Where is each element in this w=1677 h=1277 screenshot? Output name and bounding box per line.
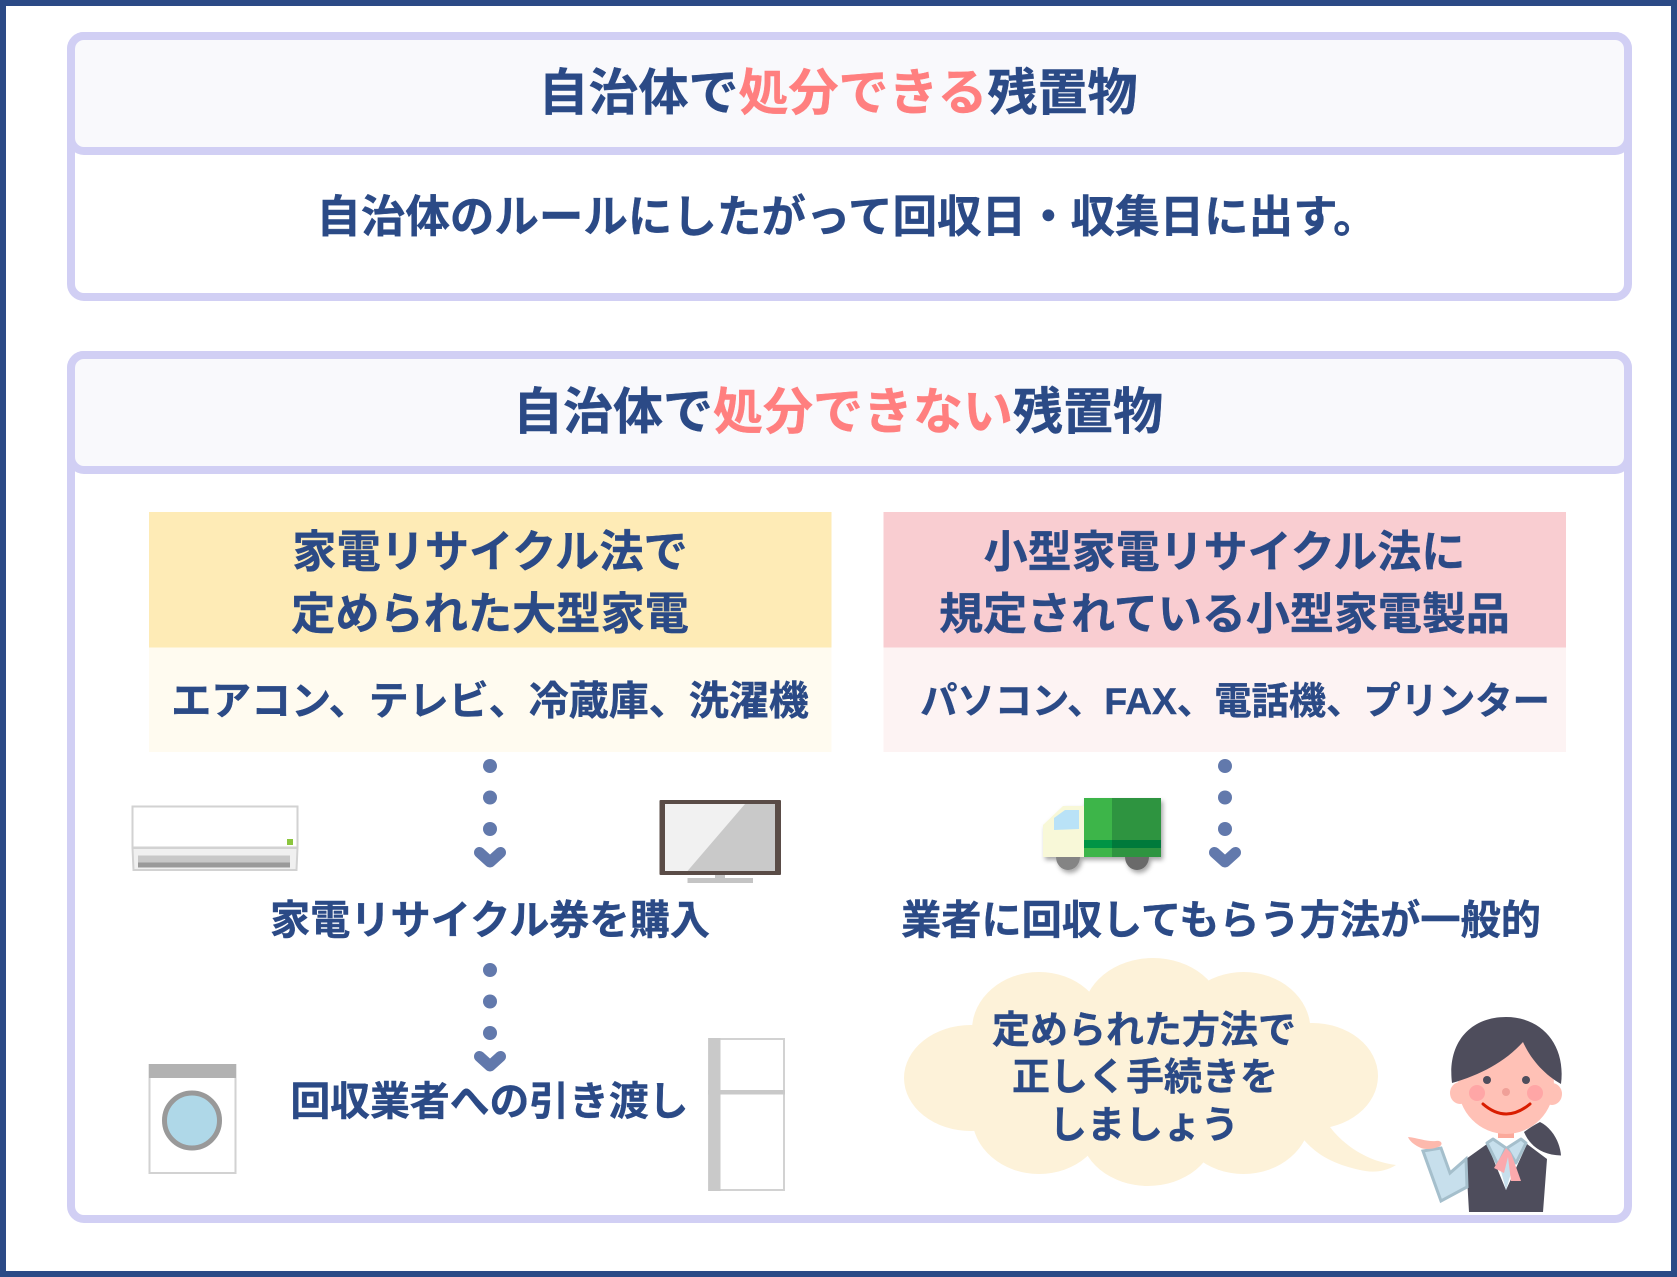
heading: can be disposed: 自治体で処分できる残置物 <box>538 65 1138 121</box>
icon: washing machine <box>149 1064 236 1173</box>
face <box>1458 1036 1554 1134</box>
eyes <box>1483 1076 1530 1084</box>
panel: can be disposed by municipality <box>71 36 1628 297</box>
ears <box>1450 1082 1562 1105</box>
hand <box>1408 1137 1442 1149</box>
icon: refrigerator <box>708 1038 785 1191</box>
bubble text: 正しく手続きを <box>1012 1057 1278 1099</box>
icon: air conditioner <box>132 806 298 870</box>
heading: cannot be disposed: 自治体で処分できない残置物 <box>513 384 1163 440</box>
illustration: woman guide <box>1408 1017 1562 1212</box>
hair <box>1451 1017 1562 1084</box>
icon: truck <box>1043 798 1161 870</box>
cheeks <box>1469 1085 1543 1101</box>
nose <box>1502 1088 1510 1096</box>
card heading: large appliances: 家電リサイクル法で <box>292 528 688 577</box>
ribbon <box>1494 1148 1521 1181</box>
card heading: small appliances: 小型家電リサイクル法に <box>984 528 1465 577</box>
collar left <box>1487 1139 1506 1165</box>
list: small appliances: パソコン、FAX、電話機、プリンター <box>920 680 1550 722</box>
shirt front <box>1498 1148 1515 1190</box>
panel: cannot be disposed by municipality <box>71 355 1628 1219</box>
panel header: cannot be disposed <box>71 355 1628 470</box>
card heading: small appliances: 規定されている小型家電製品 <box>939 590 1510 639</box>
arrow: right step <box>1214 759 1236 862</box>
icon: television <box>660 800 781 883</box>
panel header: can be disposed <box>71 36 1628 151</box>
mouth <box>1483 1104 1530 1114</box>
ponytail <box>1524 1122 1561 1156</box>
speech bubble <box>904 958 1396 1186</box>
collar right <box>1507 1139 1526 1163</box>
bubble text: 定められた方法で <box>992 1010 1296 1052</box>
card: small appliances <box>884 512 1566 752</box>
arrow: left step 2 <box>480 963 500 1066</box>
sleeve <box>1423 1148 1467 1201</box>
arrow: left step 1 <box>480 759 500 862</box>
text: collection rule: 自治体のルールにしたがって回収日・収集日に出す。 <box>316 193 1378 242</box>
vest <box>1466 1144 1547 1212</box>
card: large appliances <box>149 512 832 752</box>
card heading: large appliances: 定められた大型家電 <box>291 590 689 639</box>
list: large appliances: エアコン、テレビ、冷蔵庫、洗濯機 <box>171 680 809 724</box>
text: buy recycling ticket: 家電リサイクル券を購入 <box>270 898 710 943</box>
neck <box>1498 1130 1514 1138</box>
bubble text: しましょう <box>1049 1105 1239 1147</box>
text: hand over to collector: 回収業者への引き渡し <box>291 1080 688 1124</box>
text: have collector pick up: 業者に回収してもらう方法が一般的 <box>901 898 1541 943</box>
